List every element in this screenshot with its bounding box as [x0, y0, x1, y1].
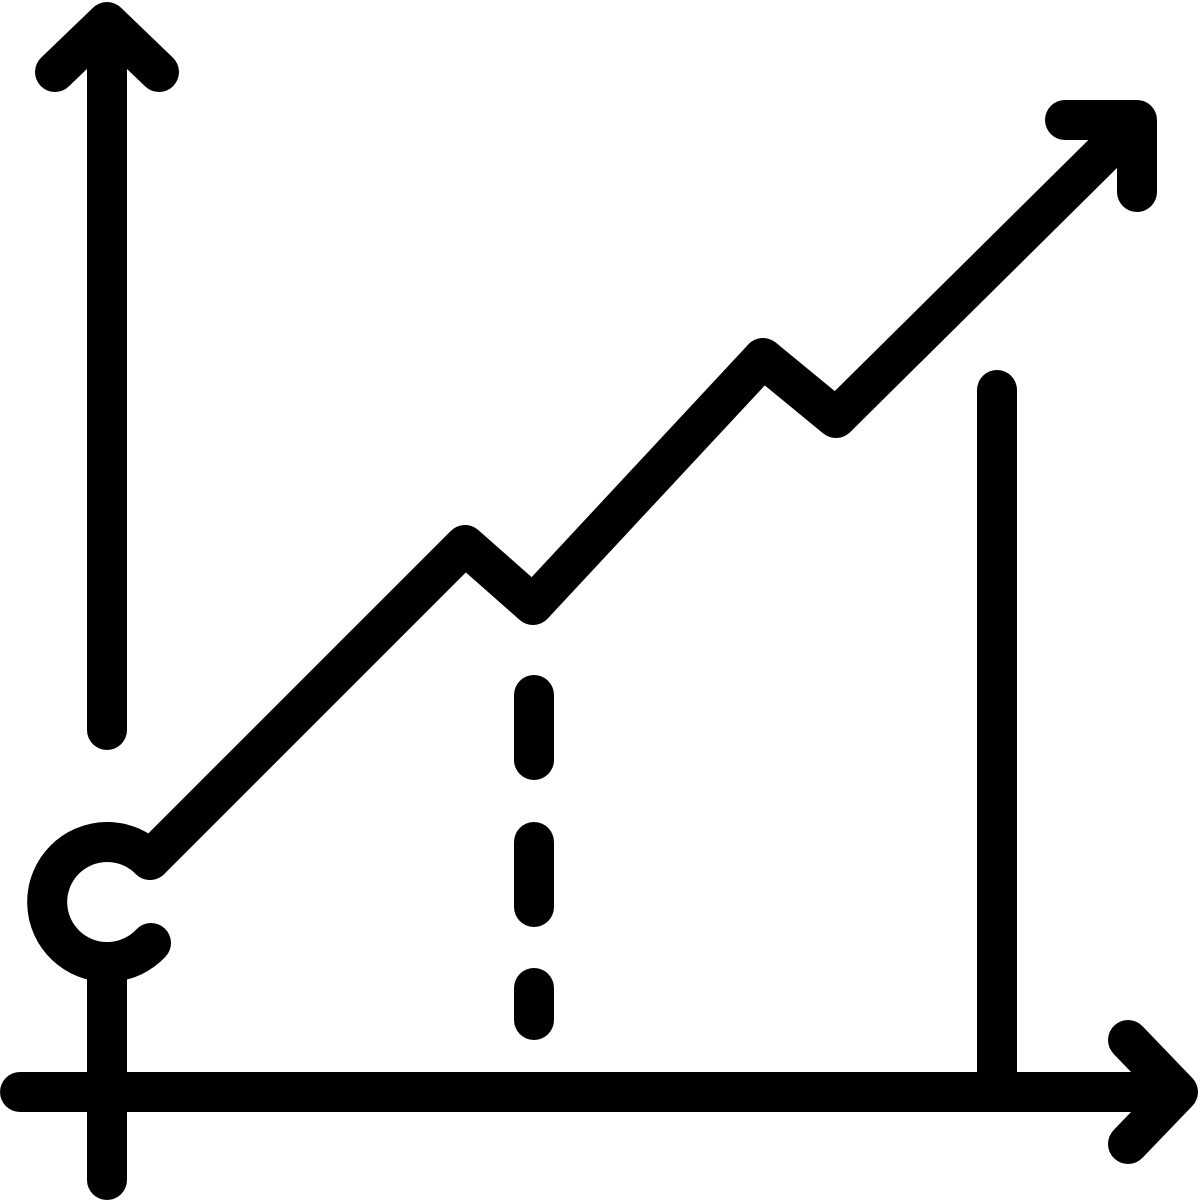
start circle [47, 842, 151, 962]
lower vertical axis [87, 965, 127, 1180]
right vertical marker [977, 390, 1017, 1092]
dashed marker line [514, 695, 554, 1020]
horizontal axis arrow [20, 1040, 1178, 1144]
trend line arrow [150, 120, 1137, 860]
vertical axis arrow [55, 22, 159, 730]
